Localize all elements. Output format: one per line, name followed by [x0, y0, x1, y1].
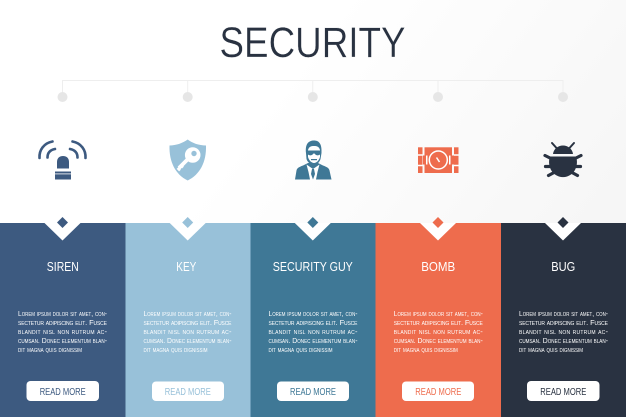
notch	[44, 223, 80, 240]
body text: cumsan. Donec elementum blan-	[144, 336, 232, 345]
button: read more	[26, 381, 99, 401]
heading: bug: BUG	[551, 259, 575, 274]
button: read more: READ MORE	[165, 387, 211, 398]
body text: sectetur adipiscing elit. Fusce	[394, 318, 483, 327]
body text: Lorem ipsum dolor sit amet, con-	[519, 309, 608, 318]
body text: sectetur adipiscing elit. Fusce	[144, 318, 232, 327]
icon: security guy	[295, 140, 332, 180]
notch	[295, 223, 331, 240]
body text: cumsan. Donec elementum blan-	[519, 336, 608, 345]
panel: security guy	[250, 217, 376, 417]
icon: bomb	[418, 147, 458, 173]
body text	[519, 309, 609, 354]
title: SECURITY	[220, 19, 406, 67]
body text: dit magna quis dignissim	[394, 345, 458, 354]
diamond marker	[432, 217, 444, 228]
diamond marker	[307, 217, 318, 228]
panel: key	[126, 217, 251, 417]
heading: siren: SIREN	[47, 259, 79, 274]
body text: dit magna quis dignissim	[519, 345, 583, 354]
panel: bomb	[376, 217, 502, 417]
body text	[268, 309, 358, 354]
notch	[170, 223, 206, 240]
body text: Lorem ipsum dolor sit amet, con-	[144, 309, 232, 318]
icon: siren	[39, 142, 86, 180]
icon: bug	[545, 143, 581, 177]
body text: blandit nisl non rutrum ac-	[394, 327, 483, 336]
body text: dit magna quis dignissim	[144, 345, 208, 354]
icon: key shield	[169, 140, 206, 180]
body text	[144, 309, 232, 354]
body text: sectetur adipiscing elit. Fusce	[519, 318, 609, 327]
body text	[18, 309, 108, 354]
panel: bug	[501, 217, 626, 417]
notch	[420, 223, 456, 240]
body text: Lorem ipsum dolor sit amet, con-	[268, 309, 358, 318]
button: read more: READ MORE	[540, 387, 587, 398]
button: read more	[277, 382, 349, 401]
button: read more: READ MORE	[40, 387, 86, 398]
button: read more	[152, 382, 224, 401]
button: read more: READ MORE	[415, 387, 462, 398]
body text: cumsan. Donec elementum blan-	[268, 336, 358, 345]
body text: blandit nisl non rutrum ac-	[18, 327, 108, 336]
diamond marker	[558, 217, 568, 228]
heading: key: KEY	[176, 259, 196, 274]
body text: cumsan. Donec elementum blan-	[18, 336, 107, 345]
body text: dit magna quis dignissim	[18, 345, 82, 354]
body text	[394, 309, 483, 354]
body text: Lorem ipsum dolor sit amet, con-	[394, 309, 483, 318]
body text: sectetur adipiscing elit. Fusce	[268, 318, 358, 327]
body text: blandit nisl non rutrum ac-	[144, 327, 232, 336]
body text: blandit nisl non rutrum ac-	[268, 327, 358, 336]
diamond marker	[182, 217, 193, 228]
diamond marker	[57, 217, 68, 228]
body text: sectetur adipiscing elit. Fusce	[18, 318, 108, 327]
heading: bomb: BOMB	[421, 259, 455, 274]
body text: dit magna quis dignissim	[268, 345, 332, 354]
body text: blandit nisl non rutrum ac-	[519, 327, 608, 336]
panel: siren	[0, 217, 126, 417]
body text: Lorem ipsum dolor sit amet, con-	[18, 309, 107, 318]
notch	[545, 223, 581, 240]
body text: cumsan. Donec elementum blan-	[394, 336, 483, 345]
button: read more	[527, 381, 600, 401]
button: read more	[402, 382, 474, 401]
heading: security guy: SECURITY GUY	[273, 259, 353, 274]
timeline connector	[58, 80, 568, 102]
button: read more: READ MORE	[290, 387, 336, 398]
